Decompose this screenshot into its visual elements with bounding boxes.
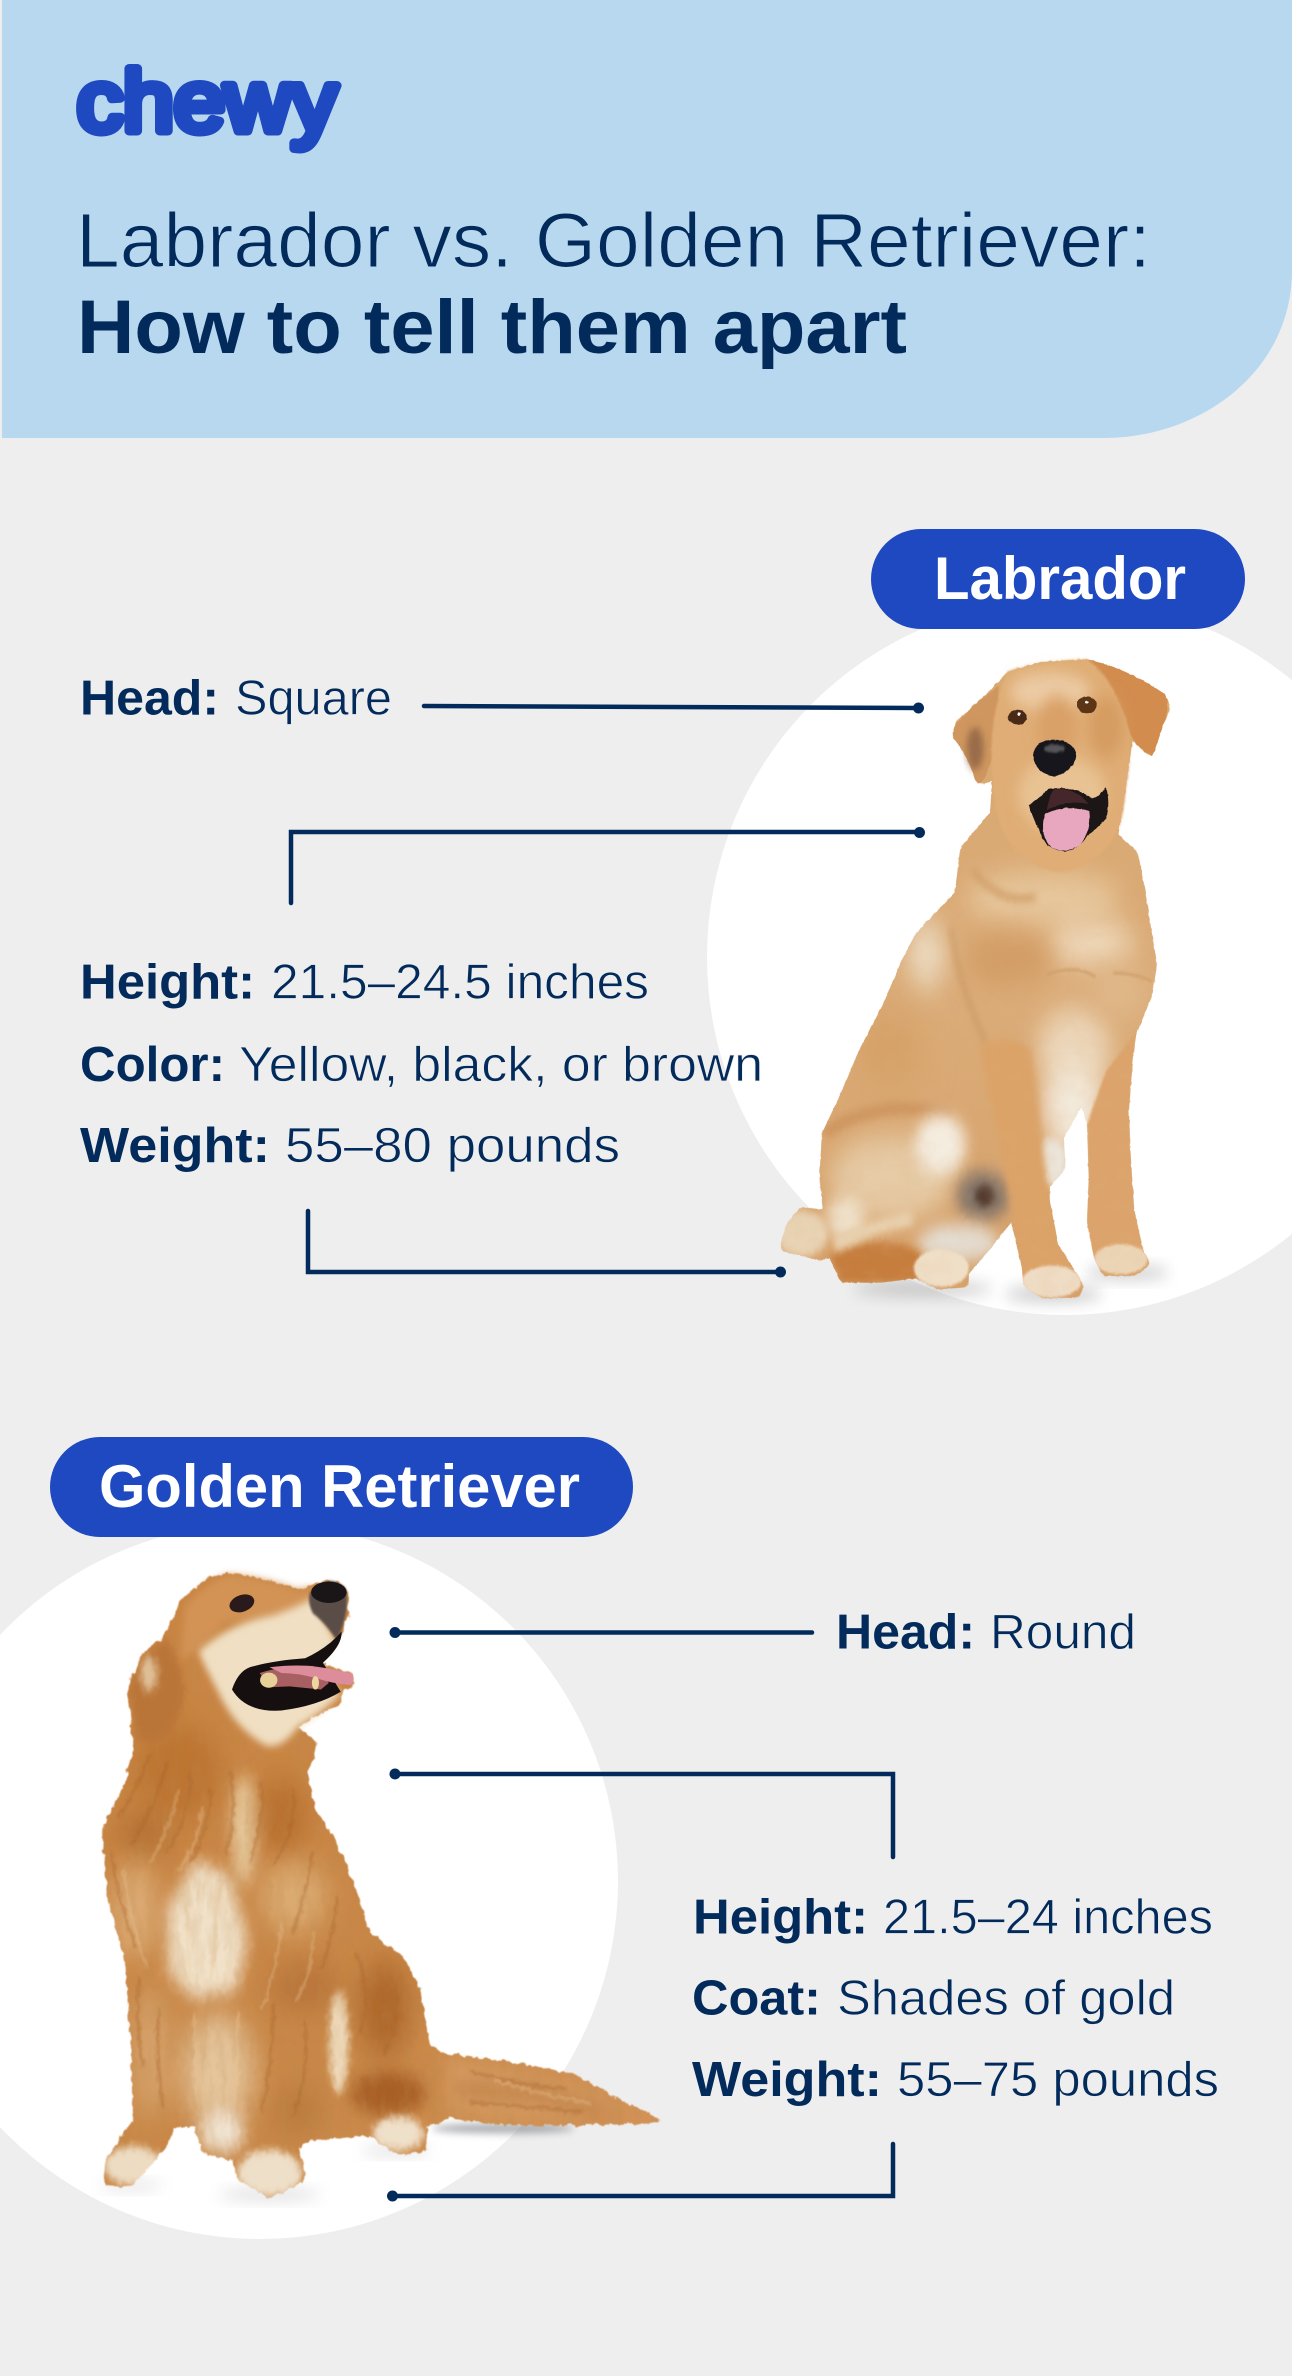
label: head square: Square bbox=[235, 672, 392, 726]
nose bbox=[1033, 740, 1076, 776]
pill: Golden Retriever: Golden Retriever bbox=[99, 1453, 580, 1520]
label: height: Height: bbox=[80, 956, 255, 1010]
front legs bbox=[980, 1040, 1067, 1274]
haunch bbox=[830, 1136, 953, 1220]
label: color: Yellow, black, or brown bbox=[239, 1038, 763, 1092]
label: color: Color: bbox=[80, 1038, 225, 1092]
label: coat: Shades of gold bbox=[837, 1972, 1175, 2026]
label: head square: Head: bbox=[80, 672, 219, 726]
label: height bbox=[693, 1890, 1213, 1944]
tail bbox=[775, 1211, 828, 1257]
label: coat bbox=[692, 1972, 1175, 2026]
title bbox=[76, 198, 1151, 370]
connector: head bbox=[390, 1627, 812, 1638]
head bbox=[991, 659, 1130, 872]
logo: chewy: chewy bbox=[77, 54, 337, 150]
ears bbox=[953, 686, 999, 783]
label: weight bbox=[80, 1119, 620, 1173]
fur texture bbox=[162, 1796, 410, 2156]
ear bbox=[129, 1638, 185, 1742]
pill: Labrador: Labrador bbox=[934, 545, 1186, 612]
pill: Golden Retriever bbox=[50, 1437, 633, 1537]
tail bbox=[444, 2056, 586, 2120]
label: head round: Round bbox=[990, 1606, 1136, 1660]
face bbox=[181, 1575, 353, 1746]
connector: head bbox=[424, 702, 924, 714]
dark patches bbox=[135, 1723, 222, 1821]
rear foot bbox=[830, 1242, 923, 1283]
eye bbox=[228, 1591, 256, 1615]
label: weight: 55–80 pounds bbox=[285, 1119, 620, 1173]
label: coat: Coat: bbox=[692, 1972, 821, 2026]
label: head round bbox=[836, 1606, 1136, 1660]
title: Labrador vs. Golden Retriever: bbox=[76, 198, 1151, 284]
label: weight bbox=[692, 2053, 1219, 2107]
panel: labrador bbox=[80, 529, 1292, 1315]
paws bbox=[104, 2146, 162, 2185]
circle behind golden retriever bbox=[0, 1523, 618, 2239]
connector: height and coat bbox=[390, 1768, 893, 1857]
fur strands bbox=[111, 1754, 582, 2116]
illustration: labrador dog bbox=[772, 651, 1177, 1303]
label: weight: Weight: bbox=[80, 1119, 270, 1173]
panel: golden retriever bbox=[0, 1437, 1219, 2239]
label: head round: Head: bbox=[836, 1606, 975, 1660]
mouth bbox=[1029, 787, 1108, 851]
light patches bbox=[111, 1861, 159, 1960]
label: weight: Weight: bbox=[692, 2053, 882, 2107]
connector: weight bbox=[387, 2144, 893, 2202]
label: height bbox=[80, 956, 649, 1010]
circle behind labrador bbox=[707, 599, 1292, 1315]
connector: height and color bbox=[291, 827, 925, 903]
label: height: Height: bbox=[693, 1890, 868, 1944]
label: head square bbox=[80, 672, 392, 726]
label: height: 21.5–24 inches bbox=[883, 1890, 1213, 1944]
eyes bbox=[1008, 710, 1027, 725]
illustration: golden retriever dog bbox=[96, 1567, 677, 2205]
mouth bbox=[232, 1632, 342, 1711]
neck and chest bbox=[965, 872, 1120, 926]
label: weight: 55–75 pounds bbox=[897, 2053, 1219, 2107]
header panel bbox=[2, 0, 1292, 438]
pill: Labrador bbox=[871, 529, 1245, 629]
title: How to tell them apart bbox=[77, 285, 907, 370]
label: height: 21.5–24.5 inches bbox=[271, 956, 649, 1010]
connector: weight bbox=[308, 1211, 786, 1278]
